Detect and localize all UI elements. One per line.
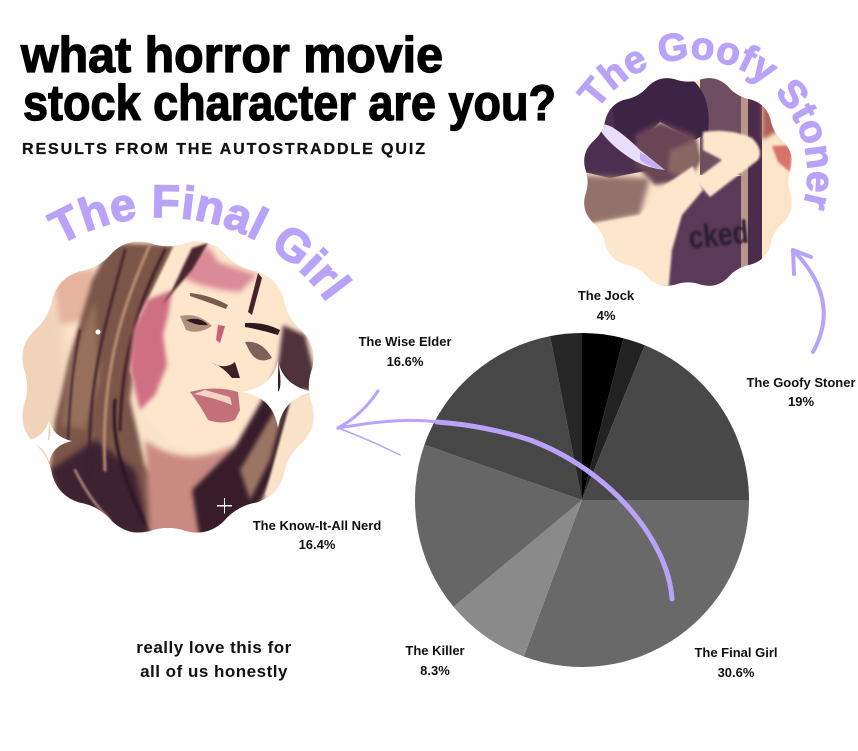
pie chart (415, 333, 749, 667)
photo: The Goofy Stoner (584, 78, 792, 286)
blood marks (130, 290, 172, 410)
nose and lips (212, 362, 240, 378)
slice: The Final Girl (524, 500, 749, 667)
subtitle: RESULTS FROM THE AUTOSTRADDLE QUIZ (22, 141, 425, 158)
photo: The Goofy Stoner: cked (687, 214, 750, 256)
label: The Final Girl (694, 645, 778, 680)
slice: The Wise Elder (424, 336, 582, 500)
caption: all of us honestly (140, 662, 288, 681)
curved name: The Final Girl: The Final Girl (45, 184, 353, 301)
photo: The Final Girl (22, 242, 314, 532)
slice: The Killer (454, 500, 582, 656)
arm (695, 131, 760, 197)
caption: really love this for (136, 638, 292, 657)
label: The Killer (405, 643, 465, 678)
shirt shadow (575, 175, 650, 225)
face (635, 122, 700, 185)
label: The Goofy Stoner: The Goofy Stoner (746, 375, 856, 390)
slice: The Know-It-All Nerd (415, 445, 582, 607)
slice: dark unlabeled (582, 338, 645, 500)
title: what horror movie (20, 27, 443, 83)
caption (136, 638, 292, 681)
slice: The Goofy Stoner (582, 345, 749, 500)
hair and shoulder (584, 100, 646, 178)
label: The Wise Elder: 16.6% (387, 354, 424, 369)
label: The Know-It-All Nerd (253, 518, 381, 552)
label: The Killer: The Killer (405, 643, 465, 658)
brush stroke (600, 124, 665, 170)
neck and dark hair (145, 440, 235, 540)
label: The Wise Elder: The Wise Elder (358, 334, 452, 349)
slice: dark unlabeled left (550, 333, 582, 500)
label: The Jock: 4% (597, 308, 616, 323)
label: The Goofy Stoner: 19% (788, 394, 814, 409)
label: The Jock: The Jock (578, 288, 635, 303)
shirt (593, 165, 704, 286)
curved name: The Goofy Stoner: The Goofy Stoner (576, 32, 829, 212)
title: stock character are you? (23, 75, 556, 131)
background door and pillars (700, 75, 745, 175)
label: The Know-It-All Nerd: 16.4% (299, 537, 336, 552)
arrow: to The Goofy Stoner (793, 250, 824, 352)
label: The Final Girl: 30.6% (718, 665, 755, 680)
label: The Final Girl: The Final Girl (694, 645, 778, 660)
title (20, 27, 556, 131)
sparkles (242, 360, 315, 428)
hair mass (48, 243, 205, 540)
slice: The Jock (582, 333, 624, 500)
arrow: to The Final Girl (338, 391, 672, 599)
label: The Wise Elder (358, 334, 452, 369)
eyes (180, 315, 212, 332)
label: The Goofy Stoner (746, 375, 856, 409)
face (128, 242, 288, 382)
label: The Killer: 8.3% (420, 663, 450, 678)
label: The Jock (578, 288, 635, 323)
label: The Know-It-All Nerd: The Know-It-All Nerd (253, 518, 381, 533)
